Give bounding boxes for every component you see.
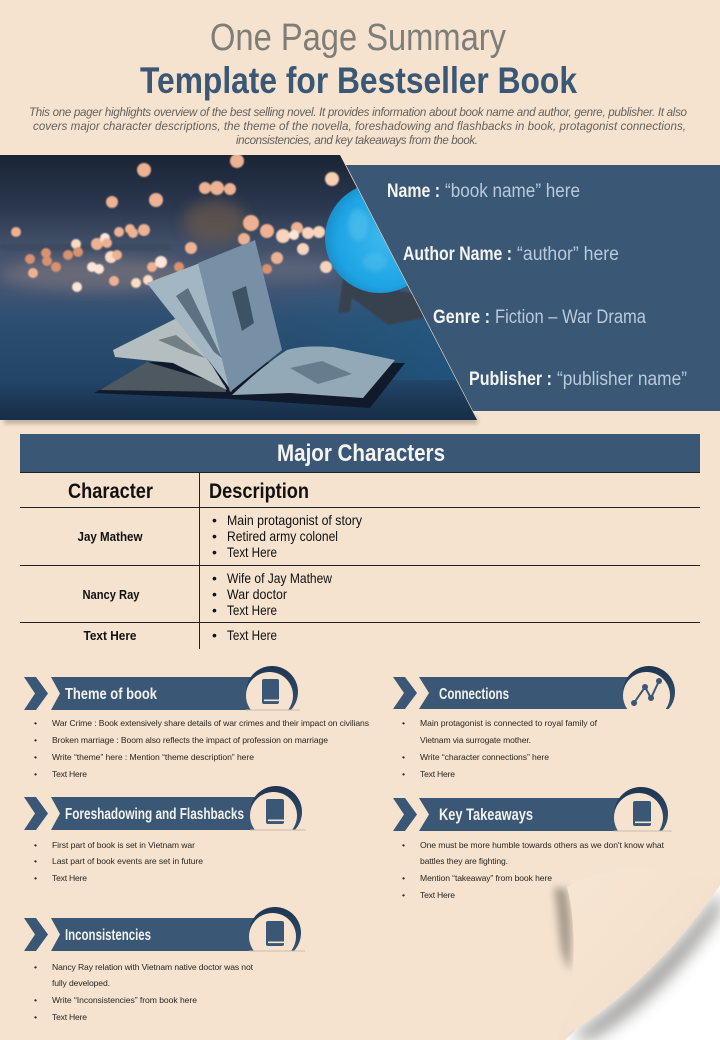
row: Text Here — [84, 627, 277, 643]
icon: book — [633, 801, 651, 826]
row: Jay Mathew: Main protagonist of story — [227, 512, 362, 528]
heading banner — [24, 666, 300, 710]
book name: “book name” here — [445, 181, 580, 202]
table title bar — [20, 434, 700, 472]
bullet list: • — [34, 752, 37, 762]
bullet list: Write “character connections” here — [420, 752, 549, 762]
bullet list: battles they are fighting. — [420, 856, 508, 866]
bullet list: One must be more humble towards others as we don't know what — [420, 840, 665, 850]
bullet list: • — [34, 769, 37, 779]
author name: “author” here — [517, 244, 619, 265]
genre: Fiction – War Drama — [495, 307, 646, 328]
bullet list: • — [34, 962, 37, 972]
heading banner: Inconsistencies — [65, 927, 151, 944]
bullet list: Text Here — [52, 769, 87, 779]
row: Jay Mathew: • — [212, 512, 217, 528]
row: Nancy Ray: Nancy Ray — [82, 587, 140, 602]
bullet list — [402, 840, 665, 900]
heading banner — [24, 907, 305, 952]
row: Nancy Ray — [82, 570, 333, 618]
bullet list: Mention “takeaway” from book here — [420, 873, 552, 883]
bullet list: • — [34, 856, 37, 866]
row: Jay Mathew: Jay Mathew — [78, 529, 143, 544]
intro text block — [29, 106, 688, 147]
bullet list: • — [402, 752, 405, 762]
column headings: Description — [209, 480, 309, 503]
bullet list: Text Here — [52, 1012, 87, 1022]
panel: connections — [393, 666, 675, 779]
heading banner: Key Takeaways — [439, 805, 533, 824]
row: Text Here: Text Here — [227, 627, 277, 643]
bullet list: • — [34, 873, 37, 883]
heading banner: Theme of book — [65, 686, 157, 703]
row: Nancy Ray: • — [212, 602, 217, 618]
row: Nancy Ray: Text Here — [227, 602, 277, 618]
panel: theme of book — [24, 666, 369, 779]
bullet list: Text Here — [420, 890, 455, 900]
bullet list — [34, 962, 254, 1022]
page curl — [554, 869, 720, 1040]
bullet list: • — [402, 769, 405, 779]
bullet list: Main protagonist is connected to royal family of — [420, 718, 598, 728]
bullet list: • — [34, 995, 37, 1005]
intro text block: This one pager highlights overview of the best selling novel. It provides information about book name and author, genre, publisher. It also — [29, 106, 688, 119]
row: Jay Mathew: • — [212, 544, 217, 560]
bullet list: • — [402, 890, 405, 900]
panel: foreshadowing and flashbacks — [24, 786, 306, 883]
heading banner: Connections — [439, 686, 509, 703]
photo: open book with bokeh lights — [0, 154, 480, 424]
row: Text Here: • — [212, 627, 217, 643]
heading banner — [393, 666, 675, 709]
publisher: Publisher : — [469, 369, 552, 390]
row: Text Here: Text Here — [84, 628, 136, 643]
bullet list: Write “Inconsistencies” from book here — [52, 995, 197, 1005]
row: Nancy Ray: War doctor — [227, 586, 287, 602]
intro text block: inconsistencies, and key takeaways from the book. — [236, 134, 478, 147]
column headings: Character — [68, 480, 153, 503]
publisher: “publisher name” — [557, 369, 687, 390]
heading banner — [393, 787, 672, 832]
bullet list: Nancy Ray relation with Vietnam native doctor was not — [52, 962, 254, 972]
bullet list — [34, 840, 203, 883]
heading banner — [24, 786, 306, 830]
bullet list: War Crime : Book extensively share details of war crimes and their impact on civilians — [52, 718, 369, 728]
row: Jay Mathew: Retired army colonel — [227, 528, 338, 544]
row: Jay Mathew — [78, 512, 362, 560]
bullet list: • — [34, 1012, 37, 1022]
icon: book — [266, 921, 284, 946]
icon: book — [262, 679, 279, 704]
genre — [433, 307, 646, 328]
bullet list: fully developed. — [52, 978, 110, 988]
publisher — [469, 369, 687, 390]
bullet list: • — [402, 873, 405, 883]
book name: Name : — [387, 181, 440, 202]
bullet list: Text Here — [52, 873, 87, 883]
row: Nancy Ray: • — [212, 586, 217, 602]
panel: inconsistencies — [24, 907, 305, 1022]
heading banner: Foreshadowing and Flashbacks — [65, 806, 244, 823]
intro text block: covers major character descriptions, the theme of the novella, foreshadowing and flashbacks in book, protagonist connections, — [33, 120, 686, 133]
bullet list: • — [34, 840, 37, 850]
bullet list: Broken marriage : Boom also reflects the impact of profession on marriage — [52, 735, 328, 745]
panel: key takeaways — [393, 787, 672, 900]
bullet list: Text Here — [420, 769, 455, 779]
title: Template for Bestseller Book — [140, 60, 577, 101]
bullet list: • — [34, 718, 37, 728]
bullet list — [34, 718, 369, 779]
bullet list: • — [34, 735, 37, 745]
author name — [403, 244, 619, 265]
table: major characters — [20, 434, 700, 649]
title: One Page Summary — [210, 17, 506, 59]
title — [140, 17, 577, 101]
row: Nancy Ray: • — [212, 570, 217, 586]
bullet list: Write “theme” here : Mention “theme description” here — [52, 752, 254, 762]
icon: line graph — [631, 678, 662, 706]
icon: book — [266, 799, 284, 824]
panel: book details — [346, 165, 720, 411]
bullet list: • — [402, 718, 405, 728]
book name — [387, 181, 580, 202]
row: Jay Mathew: • — [212, 528, 217, 544]
author name: Author Name : — [403, 244, 512, 265]
bullet list: • — [402, 840, 405, 850]
bullet list — [402, 718, 598, 779]
row: Nancy Ray: Wife of Jay Mathew — [227, 570, 333, 586]
row: Jay Mathew: Text Here — [227, 544, 277, 560]
bullet list: Last part of book events are set in future — [52, 856, 203, 866]
genre: Genre : — [433, 307, 490, 328]
bullet list: Vietnam via surrogate mother. — [420, 735, 531, 745]
bullet list: First part of book is set in Vietnam war — [52, 840, 195, 850]
table title bar: Major Characters — [277, 440, 445, 467]
column headings — [68, 480, 309, 503]
